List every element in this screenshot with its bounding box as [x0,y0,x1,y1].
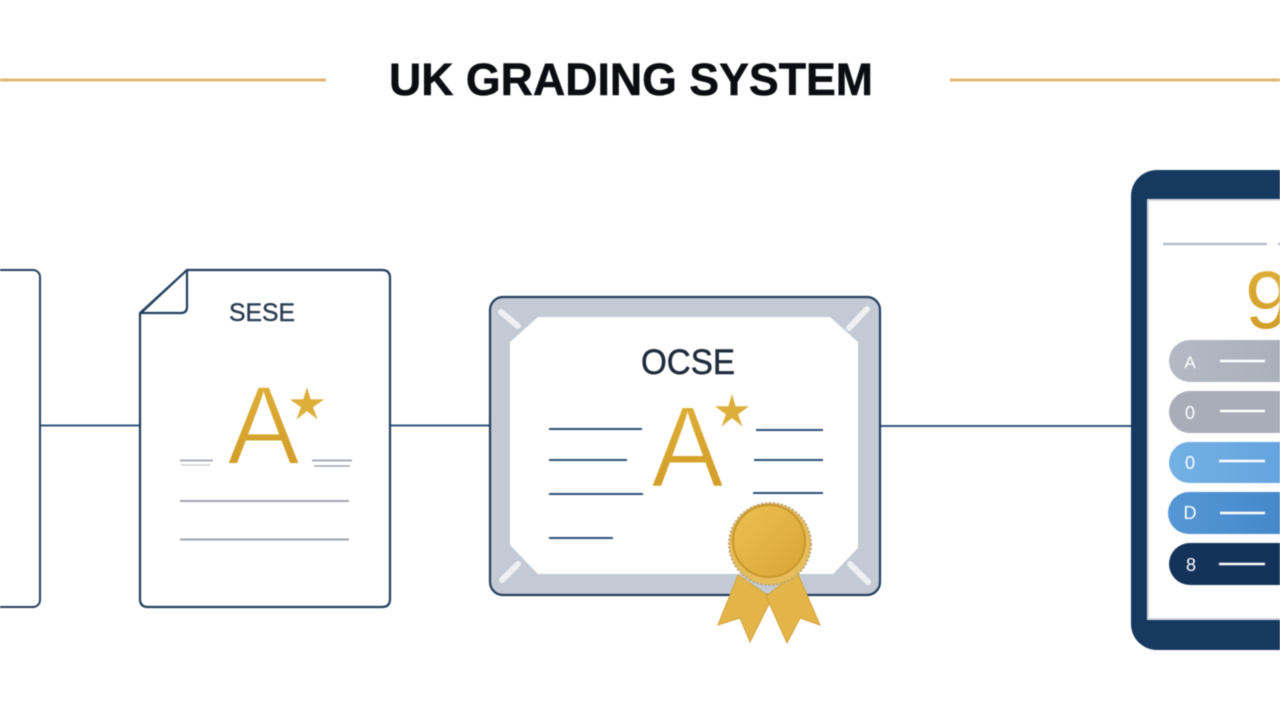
text lines [180,460,352,540]
seal scalloped edge [729,503,811,585]
panel: certificate [490,297,880,643]
grade letter: A [651,382,725,512]
panel: tablet [1131,170,1280,650]
certificate frame [490,297,880,595]
tablet body [1131,170,1280,650]
tablet screen [1148,200,1280,619]
folded corner [141,270,187,313]
panel: exam paper document [140,270,390,607]
grade row 4: D [1184,503,1196,523]
document label: SESE [229,299,295,327]
left ribbon [718,575,772,642]
left gold rule [0,78,326,82]
grade row 1 [1169,340,1280,382]
connector lines [40,424,1131,427]
grade row 3: 0 [1185,453,1195,473]
grade row 2 [1169,391,1280,433]
grade row 5 [1169,543,1280,585]
grade row 5: 8 [1186,555,1196,575]
grade letter: A [227,363,300,488]
frame corner highlights [501,309,868,582]
grade row 1: A [1184,353,1196,372]
seal face [733,505,805,577]
certificate text lines [549,429,823,538]
right gold rule [950,78,1280,82]
certificate paper [510,317,858,574]
heading: UK GRADING SYSTEM [389,54,873,105]
document outline [140,270,390,607]
title with gold rules [0,54,1280,105]
grade row 4 [1168,492,1280,534]
grade row 2: 0 [1185,403,1195,423]
grade star [715,394,749,427]
screen header rule [1163,243,1280,245]
certificate label: OCSE [641,343,735,382]
grade row 3 [1169,442,1280,483]
partial document at left edge [0,270,40,607]
grade star [290,387,324,420]
right ribbon [766,572,820,643]
rosette seal and ribbons [718,503,820,643]
